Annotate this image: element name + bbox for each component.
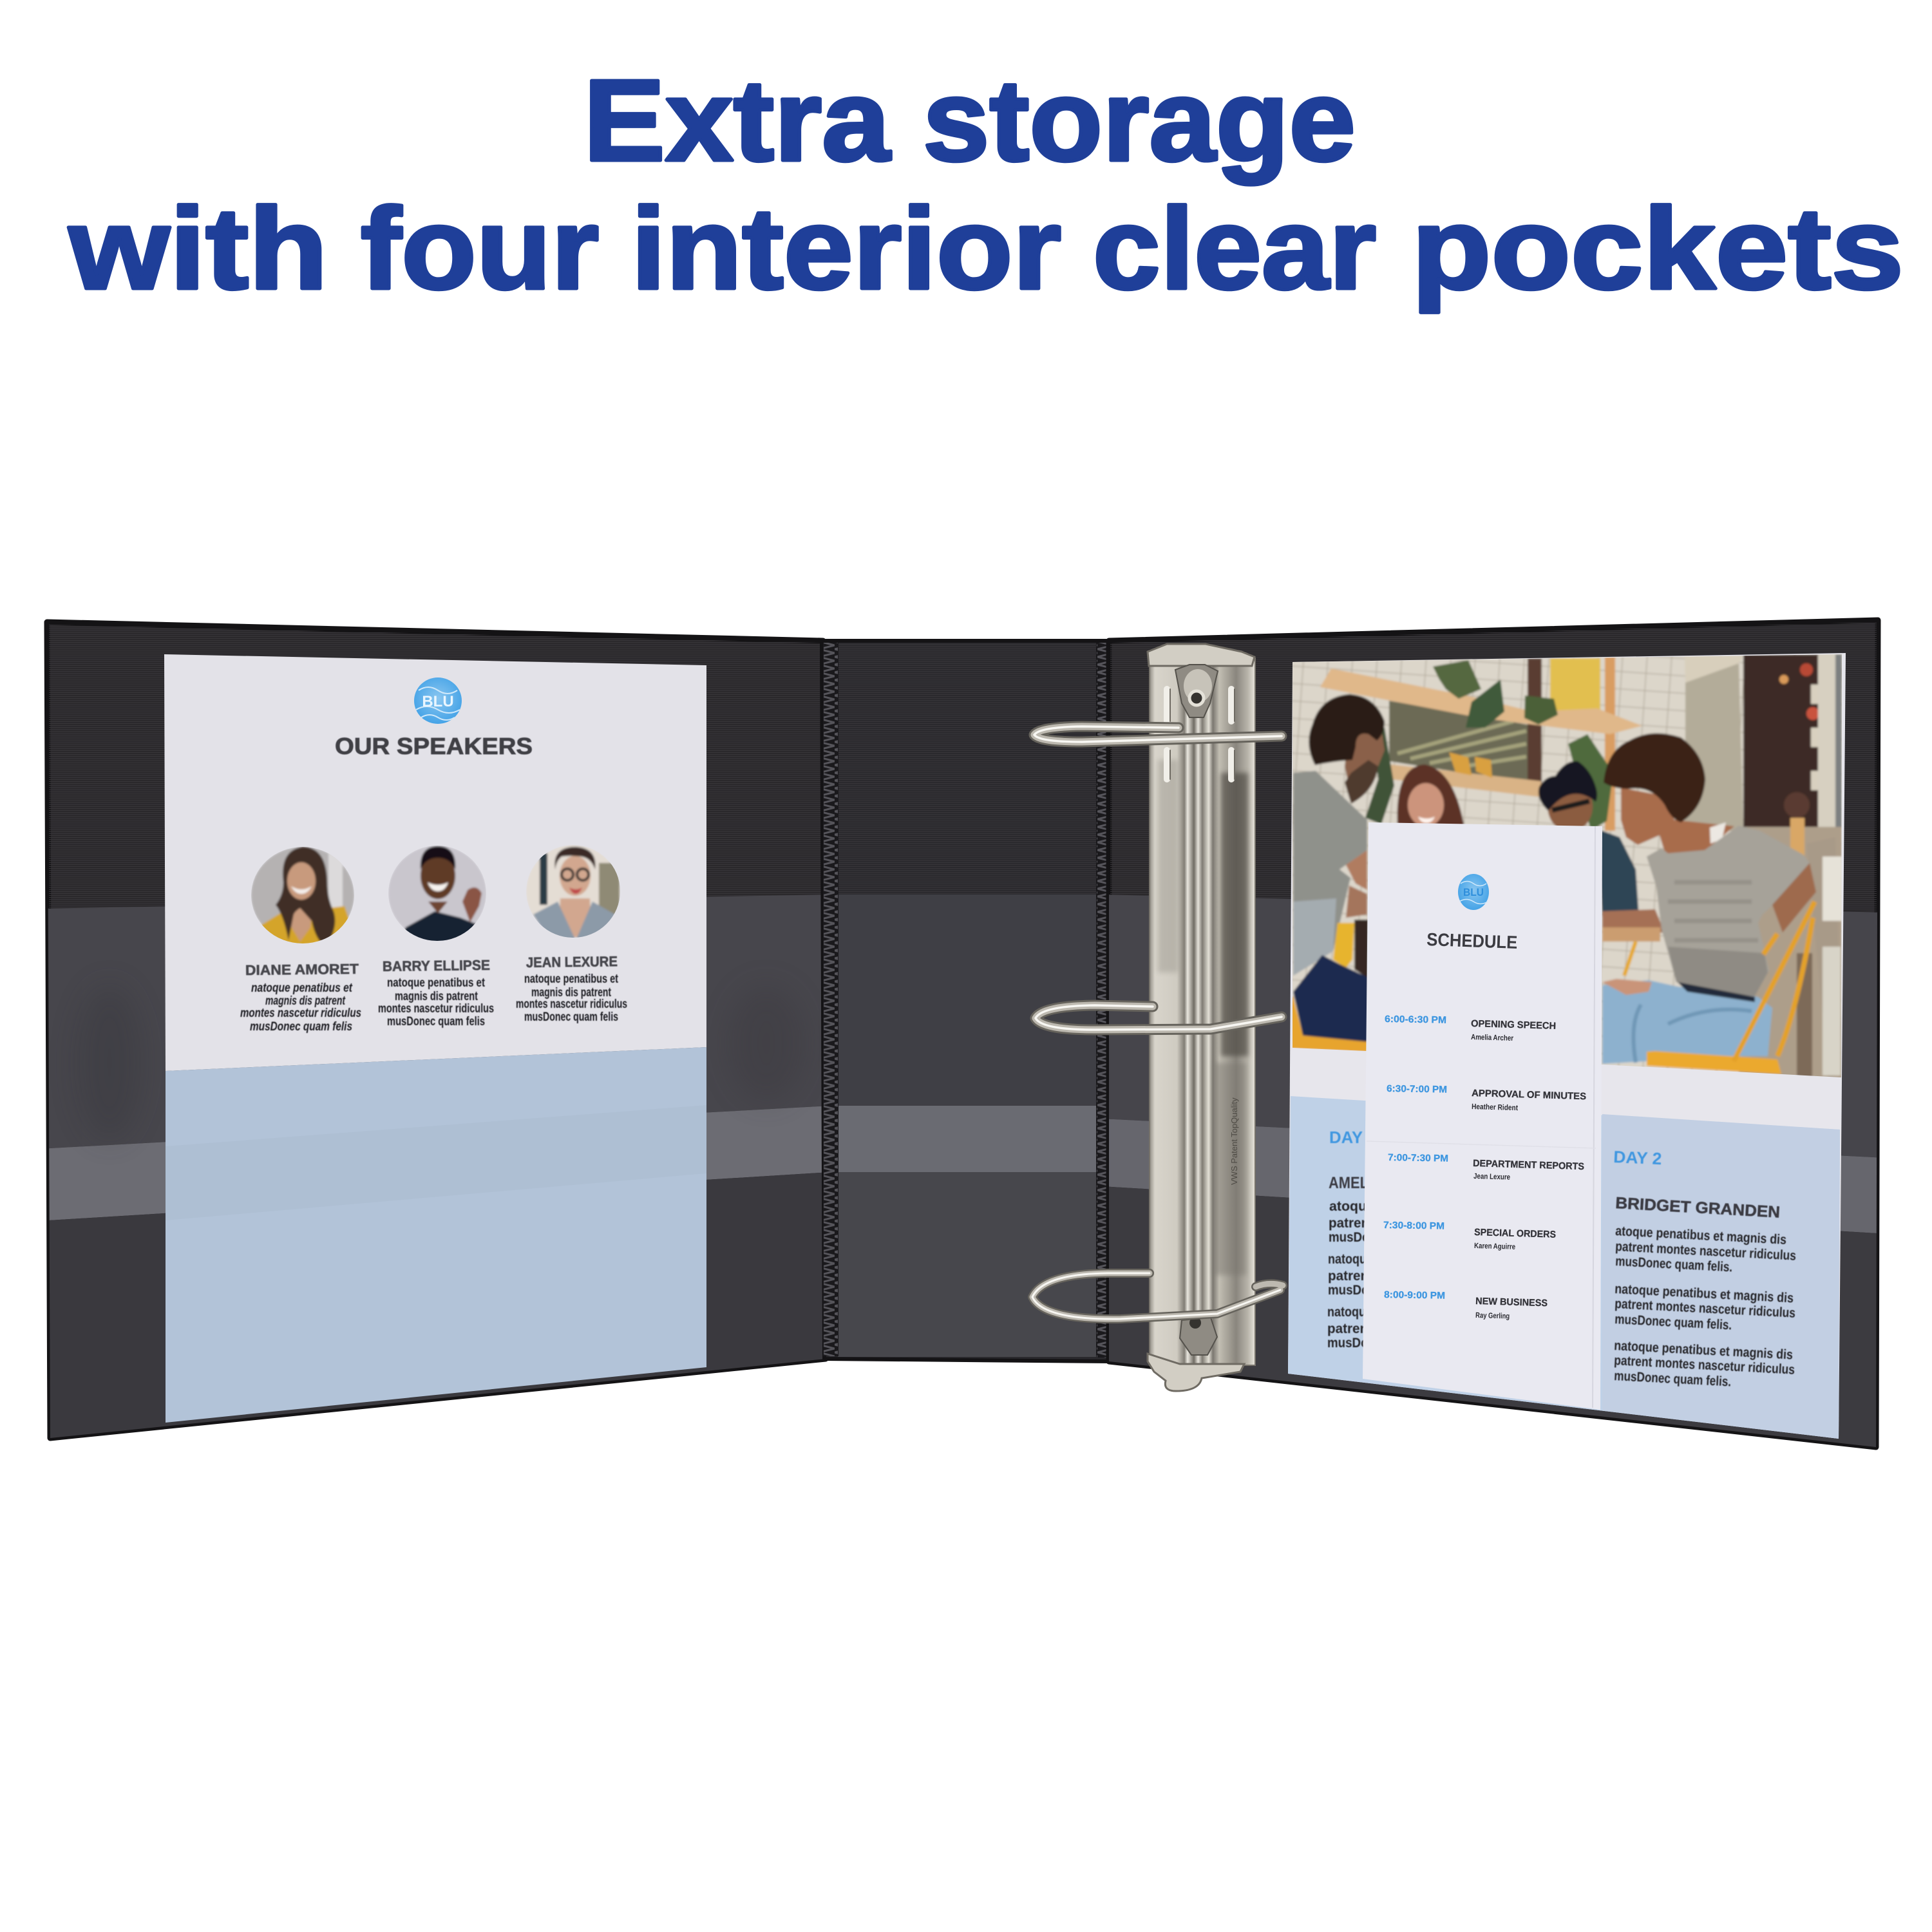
title: with [68,184,328,314]
text: day 2 column: musDonec quam felis. [1615,1312,1732,1333]
panel: schedule insert [1363,822,1602,1410]
speaker: Jean Lexure: magnis dis patrent [531,986,611,999]
speaker: Barry Ellipse [378,957,494,1028]
man at left [1293,770,1368,949]
text: day 2 column: natoque penatibus et magnis dis [1614,1338,1794,1363]
speaker: Barry Ellipse: musDonec quam felis [387,1015,485,1028]
text: day 2 column: patrent montes nascetur ridiculus [1614,1353,1795,1378]
speaker: Jean Lexure: musDonec quam felis [524,1010,618,1024]
title: four [361,184,599,314]
text: day 1 column: patrent [1327,1321,1372,1336]
text: day 1 column: natoque [1328,1252,1373,1267]
speaker: Jean Lexure: JEAN LEXURE [526,953,618,971]
jeans and stool [1602,980,1772,1064]
schedule row: approval of minutes: 6:30-7:00 PM [1387,1083,1447,1095]
text: day 1 column: musDon [1327,1336,1376,1350]
text: day 2 column: musDonec quam felis. [1614,1368,1732,1390]
speaker: Barry Ellipse: BARRY ELLIPSE [383,957,490,974]
icon: BLU logo [1458,874,1489,910]
schedule row: special orders [1383,1220,1556,1251]
schedule row: approval of minutes: APPROVAL OF MINUTES [1472,1088,1586,1102]
text: day 1 column: musDon [1328,1283,1376,1298]
man with hat [1602,829,1640,914]
title: storage [923,56,1356,185]
icon: BLU logo: BLU [422,693,454,710]
schedule row: approval of minutes [1387,1083,1586,1112]
schedule row: new business: Ray Gerling [1475,1311,1510,1321]
title: interior [631,184,1061,314]
panel: right sheet, event programme [1288,650,1848,1439]
speaker: Jean Lexure [516,953,627,1024]
title: Extra [583,56,891,185]
title [68,56,1904,314]
speaker: Diane Amoret [240,961,361,1034]
ring: middle [1036,1005,1282,1030]
icon: BLU logo: BLU [1463,886,1484,898]
speaker: Diane Amoret: DIANE AMORET [245,961,359,978]
speaker: Diane Amoret: magnis dis patrent [265,994,345,1008]
speaker: Diane Amoret: musDonec quam felis [250,1020,352,1034]
schedule row: special orders: Karen Aguirre [1474,1241,1516,1251]
photo: cafe friends [1288,650,1848,1084]
speaker: Barry Ellipse: magnis dis patrent [395,990,478,1003]
speaker: Jean Lexure: montes nascetur ridiculus [516,998,627,1011]
schedule row: opening speech [1385,1014,1556,1043]
bottom lever clamp [1148,1317,1244,1391]
text: day 2 column: patrent montes nascetur ridiculus [1615,1296,1796,1321]
speaker: Barry Ellipse: natoque penatibus et [387,976,486,990]
text: day 1 column [1327,1128,1377,1350]
plate text: VWS Patent TopQuality [1229,1097,1239,1185]
shelves and plants [1389,701,1528,783]
schedule row: opening speech: Amelia Archer [1471,1032,1514,1043]
panel: spine [822,641,1110,1361]
text: day 2 column: BRIDGET GRANDEN [1615,1194,1781,1222]
avatar: Barry Ellipse [388,846,486,947]
schedule row: special orders: 7:30-8:00 PM [1383,1220,1444,1232]
schedule row: department reports: 7:00-7:30 PM [1388,1152,1448,1164]
text: day 2 column: DAY 2 [1613,1147,1662,1168]
schedule row: approval of minutes: Heather Rident [1472,1102,1518,1112]
text: day 2 column: atoque penatibus et magnis dis [1615,1224,1787,1247]
speaker: Jean Lexure: natoque penatibus et [524,972,619,986]
ring: top [1034,726,1282,742]
speaker: Diane Amoret: natoque penatibus et [251,981,353,995]
panel: right cover [1101,620,1887,1455]
schedule row: special orders: SPECIAL ORDERS [1474,1227,1556,1240]
binder [39,620,1887,1455]
schedule row: new business: 8:00-9:00 PM [1384,1289,1445,1302]
stitching: left spine seam [823,643,838,1356]
text: day 1 column: atoque [1329,1199,1374,1214]
avatar: Jean Lexure [526,845,620,940]
schedule row: opening speech: 6:00-6:30 PM [1385,1014,1446,1026]
text: day 1 column: patrent [1328,1269,1373,1283]
top lever clamp [1148,644,1255,779]
panel: left sheet, our speakers [164,654,706,1423]
schedule row: department reports: Jean Lexure [1473,1171,1511,1182]
text: day 1 column: musDon [1329,1230,1377,1245]
panel: left cover [39,622,831,1443]
text: day 2 column: patrent montes nascetur ridiculus [1615,1239,1797,1264]
cafe wall and window [1685,663,1743,831]
speaker: Barry Ellipse: montes nascetur ridiculus [378,1002,494,1016]
heading: our speakers: OUR SPEAKERS [335,733,533,759]
schedule row: new business [1384,1289,1548,1321]
text: day 1 column: AMEL [1329,1174,1368,1192]
text: day 2 column: musDonec quam felis. [1615,1254,1733,1275]
woman in background [1397,764,1464,828]
heading: schedule: SCHEDULE [1426,929,1518,952]
text: day 2 column: natoque penatibus et magnis dis [1615,1282,1794,1306]
text: day 1 column: natoque [1327,1305,1372,1320]
text: day 1 column: DAY [1329,1128,1363,1147]
schedule row: new business: NEW BUSINESS [1475,1296,1548,1309]
stitching: right spine seam [1096,643,1110,1358]
schedule row: department reports [1388,1152,1584,1182]
avatar: Diane Amoret [251,847,354,943]
ring: bottom [1032,1273,1283,1319]
title: pockets [1412,184,1904,314]
speaker: Diane Amoret: montes nascetur ridiculus [240,1007,361,1020]
title: clear [1093,184,1376,314]
text: day 1 column: patrent [1329,1216,1374,1231]
icon: BLU logo [414,677,462,724]
schedule row: opening speech: OPENING SPEECH [1471,1018,1556,1032]
schedule row: department reports: DEPARTMENT REPORTS [1473,1158,1584,1172]
woman with curly hair [1602,909,1665,934]
text: day 2 column [1613,1147,1797,1390]
ring mechanism plate [1148,644,1255,1391]
